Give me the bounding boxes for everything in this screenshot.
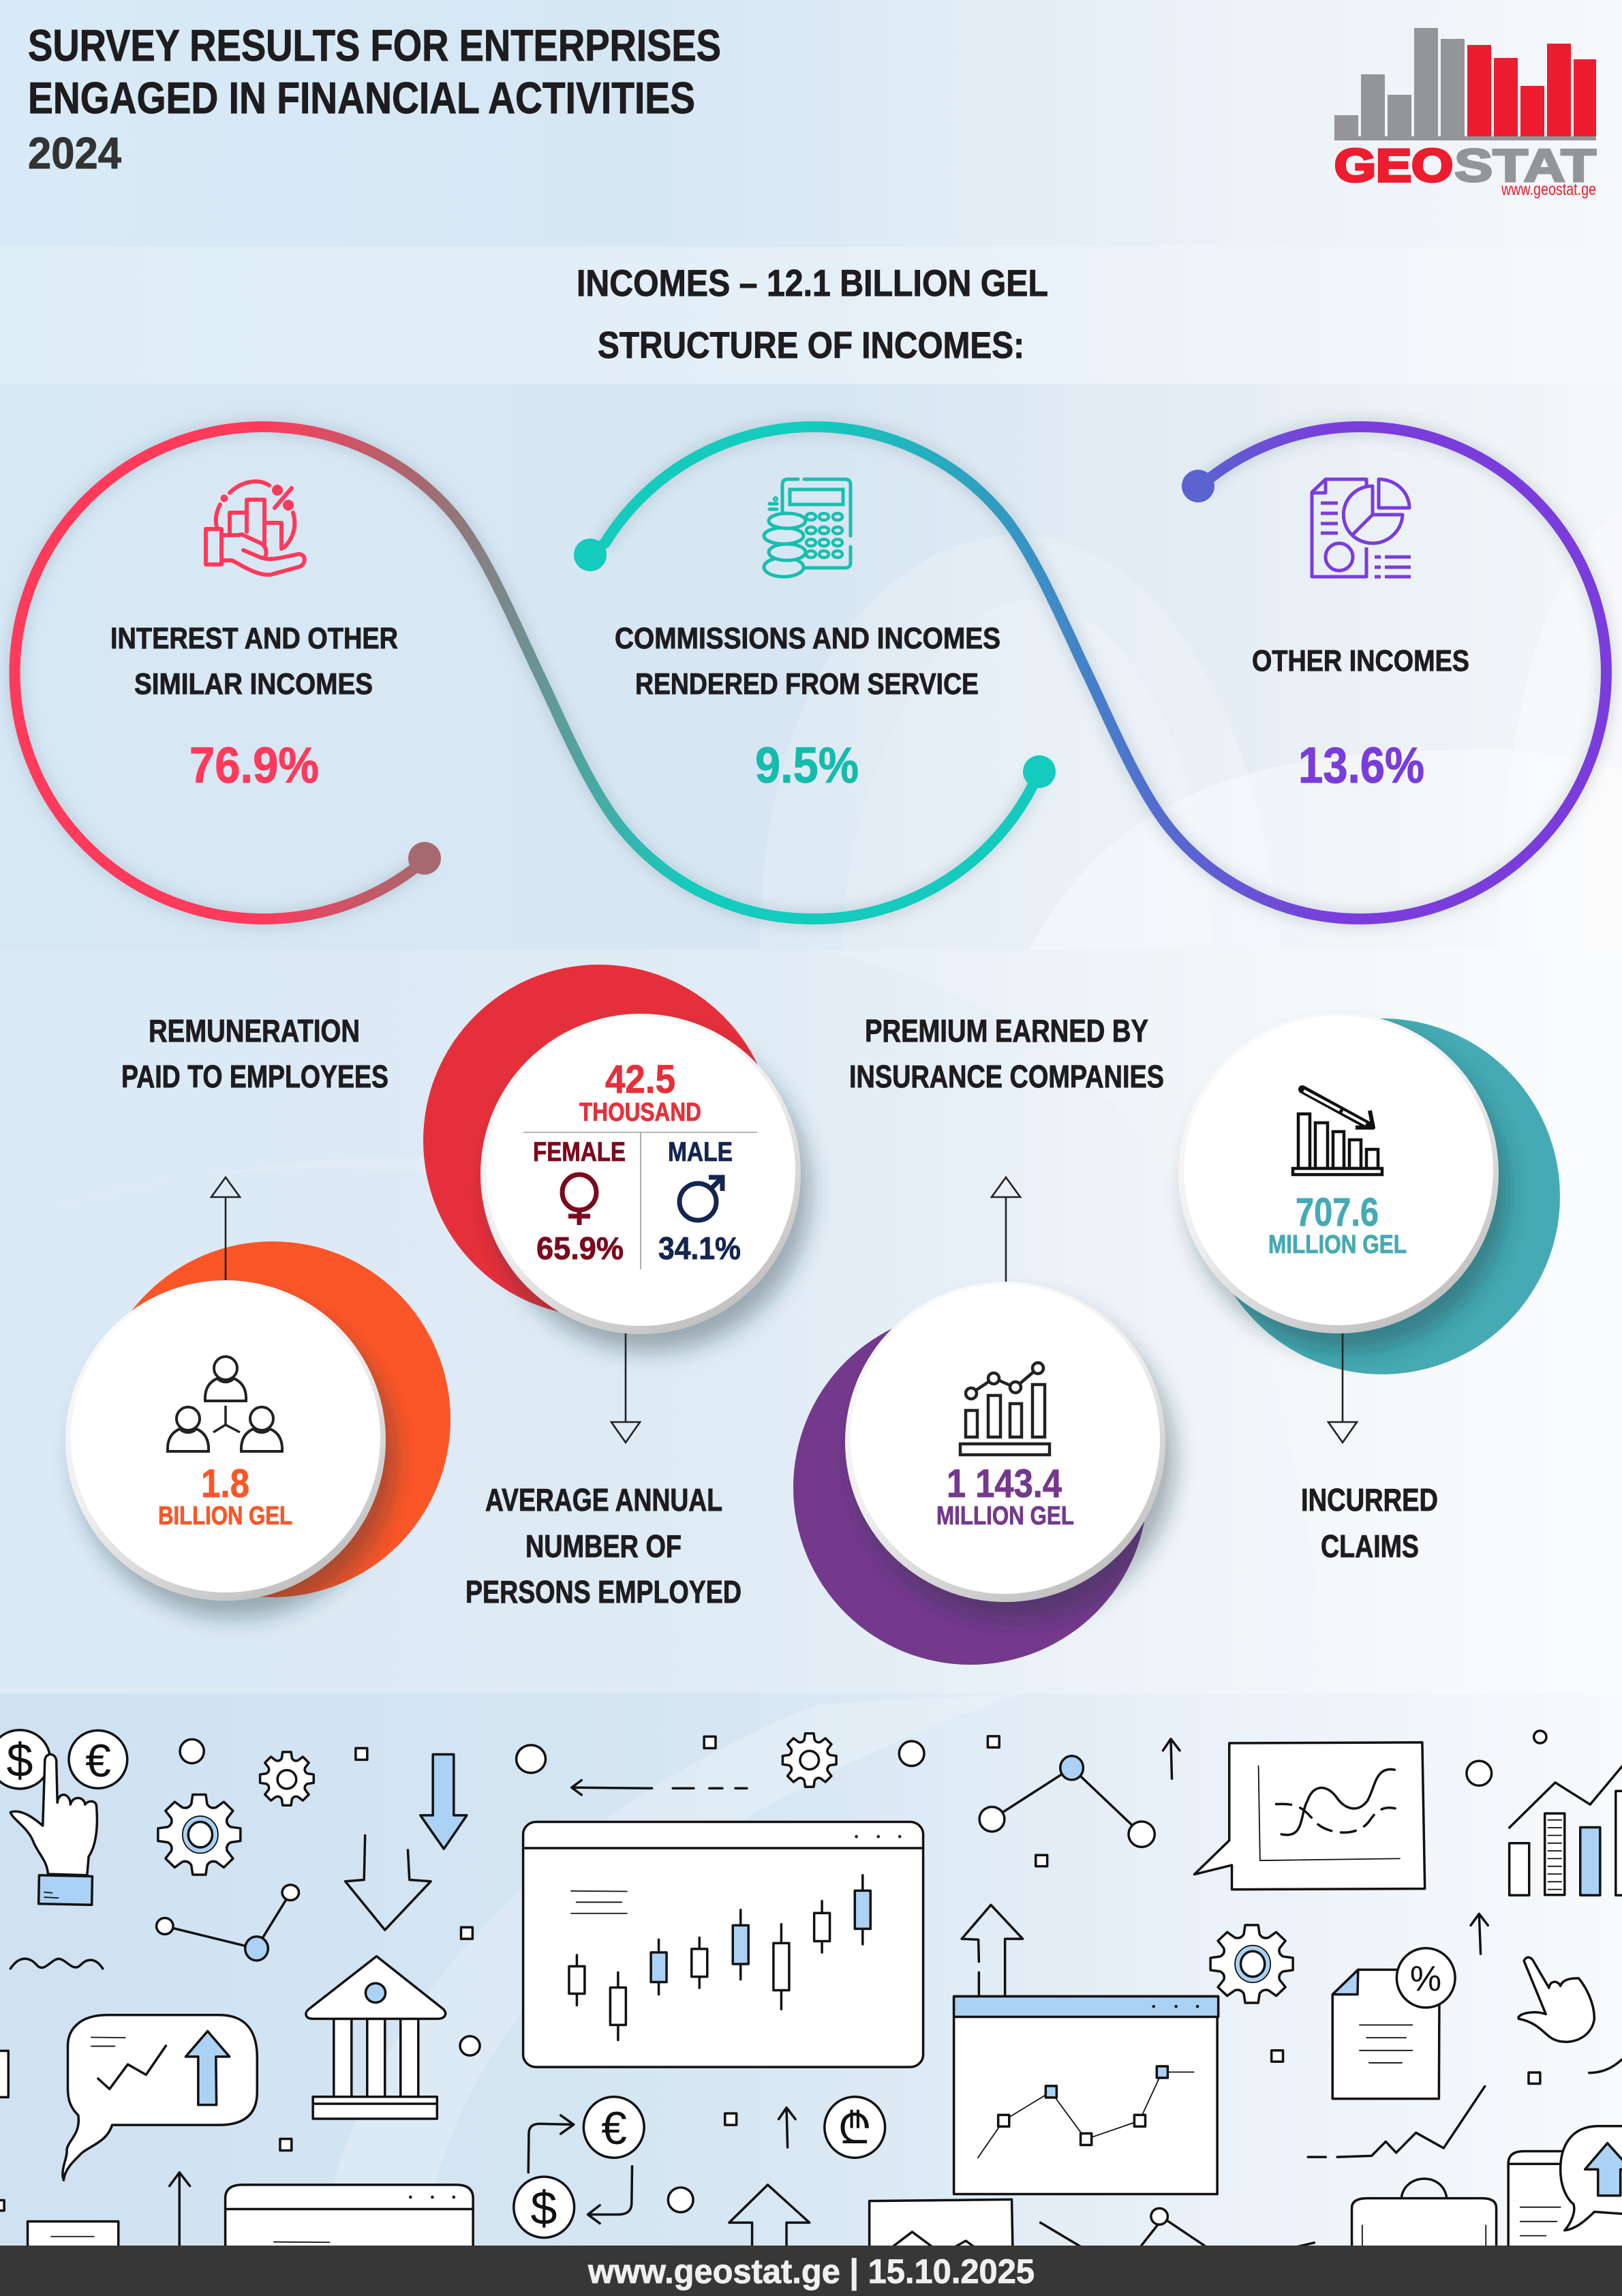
icon: bars with trend line (1510, 1762, 1622, 1895)
arrow: down (611, 1329, 640, 1442)
label: INSURANCE COMPANIES (849, 1059, 1164, 1094)
circle card (480, 1014, 801, 1334)
label (615, 622, 1000, 701)
icon: gears (158, 1734, 836, 1875)
nodes, lower (1041, 2208, 1314, 2246)
value: 1.8 (201, 1462, 249, 1506)
value (579, 1057, 701, 1127)
value (936, 1462, 1074, 1530)
arrow: outline down (346, 1835, 431, 1930)
currency symbols: € (601, 2102, 627, 2154)
label: PREMIUM EARNED BY (865, 1013, 1148, 1048)
arrow: up (992, 1177, 1020, 1282)
currency symbols (7, 1734, 1441, 2235)
label: PERSONS EMPLOYED (465, 1574, 741, 1610)
label: COMMISSIONS AND INCOMES (615, 622, 1000, 655)
value: MILLION GEL (936, 1502, 1074, 1530)
logo: Geostat: STAT (1454, 140, 1596, 192)
icon: rising bar chart (960, 1363, 1050, 1455)
circle backdrop (793, 1310, 1148, 1665)
currency symbols: % (1410, 1959, 1441, 1999)
window, lower (226, 2185, 473, 2254)
arrow: small up (779, 2108, 795, 2147)
circle backdrop (423, 965, 775, 1316)
panel: other incomes (1252, 479, 1469, 794)
circle card (1178, 1013, 1499, 1333)
heading: structure of incomes: STRUCTURE OF INCOMES: (598, 324, 1024, 366)
label (110, 622, 398, 701)
chart: candlestick window (523, 1822, 923, 2067)
circle card (65, 1280, 386, 1601)
label: INCURRED (1301, 1482, 1438, 1517)
male share: MALE (668, 1137, 733, 1167)
title: SURVEY RESULTS FOR ENTERPRISES (28, 20, 721, 70)
icon: falling bar chart (1293, 1089, 1382, 1175)
arrow: up (170, 2173, 190, 2246)
label (465, 1482, 741, 1610)
value (1268, 1190, 1407, 1259)
currency symbols: ₾ (838, 2104, 872, 2154)
icon: speech bubble with rising chart (63, 2015, 257, 2180)
arrow: dashed left (572, 1780, 747, 1795)
logo: Geostat: www.geostat.ge (1501, 180, 1596, 199)
icon: bank building (306, 1957, 446, 2119)
icon: briefcase (1352, 2179, 1497, 2254)
label: INTEREST AND OTHER (110, 622, 398, 655)
male share: 34.1% (658, 1230, 741, 1266)
label: AVERAGE ANNUAL (485, 1482, 722, 1517)
icon: dollar and euro coins (0, 1730, 127, 1789)
panel: premium earned by insurance companies (793, 1013, 1165, 1665)
icon: chart speech bubble (1194, 1742, 1425, 1890)
female share: FEMALE (533, 1137, 626, 1167)
circle backdrop (1204, 1018, 1560, 1374)
label: NUMBER OF (525, 1528, 682, 1564)
footer bar: www.geostat.ge | 15.10.2025 (587, 2252, 1035, 2291)
value (158, 1462, 292, 1530)
male share (658, 1137, 741, 1266)
label: RENDERED FROM SERVICE (635, 667, 979, 701)
currency symbols: € (85, 1735, 111, 1787)
female share: 65.9% (536, 1230, 624, 1266)
icon: document with pie chart (1312, 479, 1411, 577)
arrow: small up (1471, 1914, 1488, 1954)
arrow: blue down (420, 1754, 467, 1849)
chart: income structure curve (15, 427, 1606, 919)
panel: remuneration paid to employees (65, 1013, 450, 1601)
value: 42.5 (605, 1057, 675, 1102)
arrow: outline up (962, 1905, 1023, 1995)
value: 1 143.4 (947, 1462, 1062, 1506)
value: 76.9% (189, 737, 319, 794)
picture frame, lower (870, 2199, 1013, 2254)
icon: gear (1210, 1925, 1293, 2003)
title: ENGAGED IN FINANCIAL ACTIVITIES (28, 73, 695, 123)
icon: line chart window (954, 1997, 1219, 2194)
circle backdrop (95, 1241, 450, 1597)
title (28, 20, 721, 178)
arc fragment (1589, 2059, 1622, 2073)
label: REMUNERATION (149, 1013, 360, 1048)
icon: pointing hand (1518, 1957, 1594, 2042)
zigzag trend line (1308, 2086, 1485, 2157)
arrow: down (1328, 1329, 1357, 1442)
label: PAID TO EMPLOYEES (121, 1059, 388, 1094)
icon: scattered dots and squares (0, 1736, 737, 2212)
value: THOUSAND (579, 1098, 701, 1127)
heading: incomes: INCOMES – 12.1 BILLION GEL (577, 262, 1048, 304)
arrow: outline up bottom (729, 2185, 810, 2246)
label (121, 1013, 388, 1094)
table divider (523, 1132, 757, 1269)
arrow: up (211, 1177, 240, 1282)
icon: pointing hand (10, 1754, 97, 1905)
currency symbols: $ (7, 1734, 33, 1787)
note, lower left (28, 2222, 119, 2254)
female share (533, 1137, 626, 1266)
label (1301, 1482, 1438, 1564)
icon: currency exchange (514, 2097, 644, 2237)
label: SIMILAR INCOMES (134, 667, 373, 701)
icon: calculator and coins (764, 479, 851, 577)
value: 707.6 (1296, 1190, 1379, 1235)
logo: Geostat (1334, 28, 1596, 199)
icon: tablet with upload bubble (1508, 2126, 1622, 2254)
arrow: small up (1163, 1739, 1180, 1779)
icon: hand with bar chart (206, 481, 305, 575)
value: 9.5% (755, 737, 859, 794)
icon: network nodes (157, 1885, 299, 1961)
illustration: finance doodles, left half (0, 1730, 923, 2254)
icon: network nodes (979, 1756, 1154, 1847)
value: 13.6% (1298, 737, 1424, 794)
value: MILLION GEL (1268, 1230, 1407, 1259)
label (849, 1013, 1164, 1094)
value: BILLION GEL (158, 1502, 292, 1530)
panel: average annual number of persons employed (423, 965, 801, 1610)
label: CLAIMS (1321, 1528, 1419, 1564)
panel: interest and other similar incomes (110, 481, 398, 794)
title: 2024 (28, 128, 121, 178)
footer bar (0, 2246, 1622, 2296)
icon: lari coin (825, 2097, 885, 2158)
icon: document with percent (1332, 1948, 1455, 2099)
circle card (845, 1282, 1165, 1602)
panel: incurred claims (1178, 1013, 1560, 1564)
squiggle (10, 1959, 103, 1969)
panel: commissions and incomes rendered from service (615, 479, 1000, 794)
label: OTHER INCOMES (1252, 644, 1469, 678)
icon: people (168, 1357, 282, 1451)
currency symbols: $ (531, 2181, 557, 2235)
illustration: finance doodles, right half (825, 1731, 1622, 2254)
scattered dots and squares (899, 1731, 1546, 2083)
logo: Geostat: GEO (1334, 140, 1453, 192)
